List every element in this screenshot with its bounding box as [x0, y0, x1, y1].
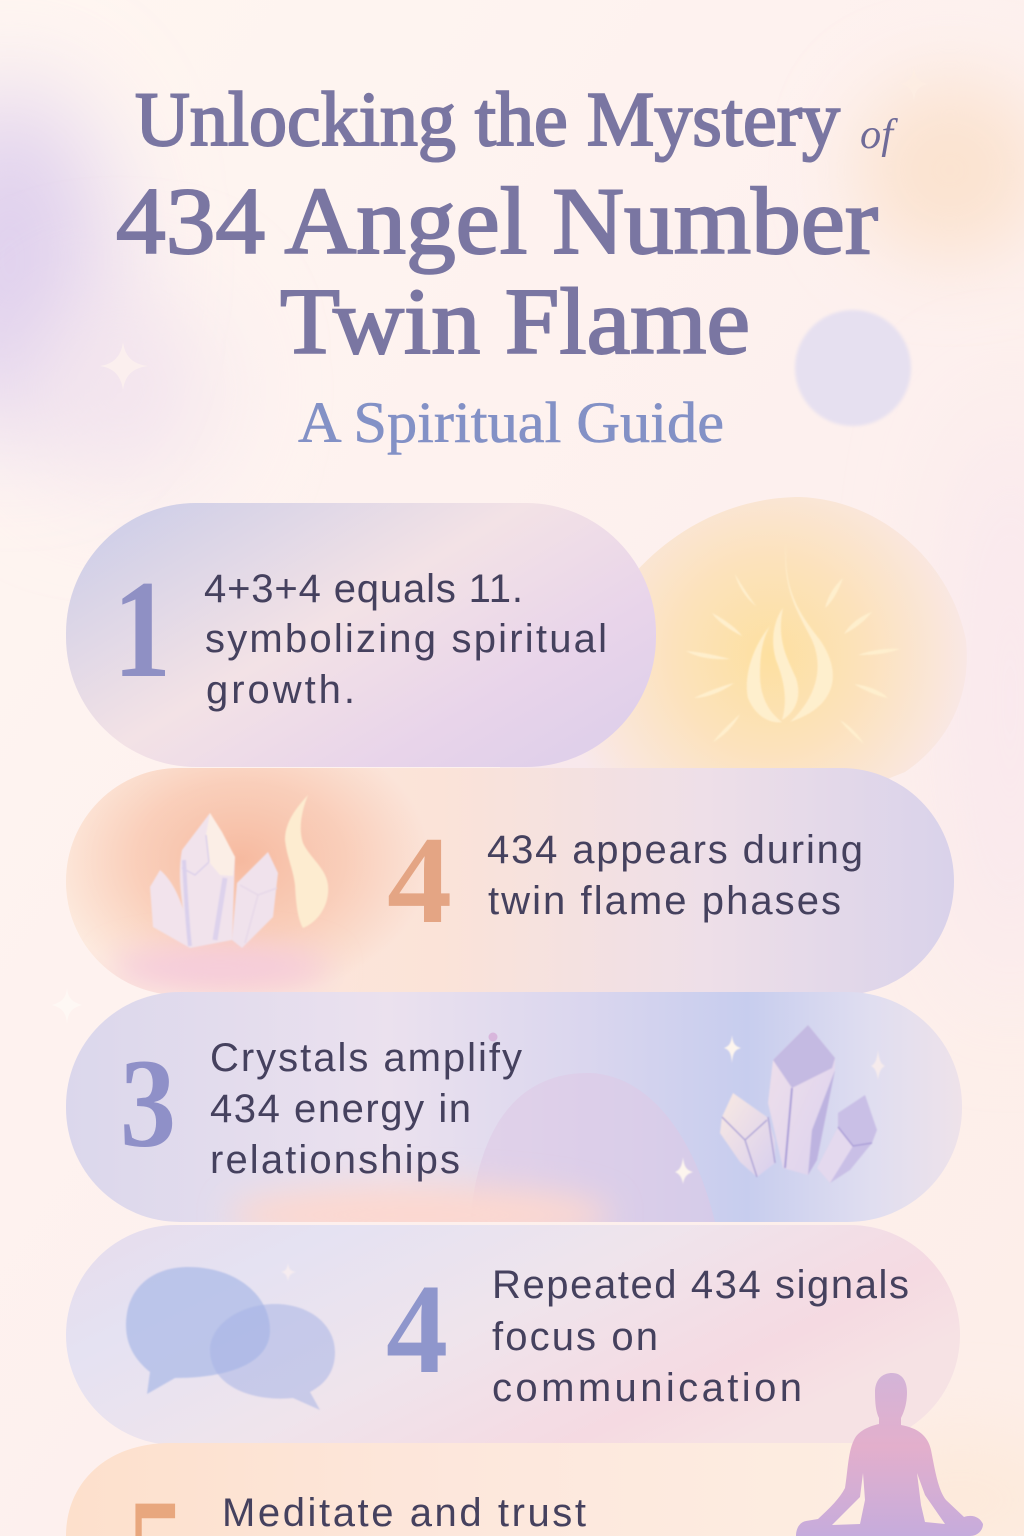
text: step 1	[204, 567, 607, 712]
side flame	[285, 795, 328, 928]
panel: step 3	[66, 992, 962, 1245]
icon: crystals and flame	[150, 795, 328, 948]
text: step 4: Repeated 434 signals	[492, 1263, 909, 1307]
subtitle: A Spiritual Guide	[298, 390, 724, 455]
text: step 4: communication	[492, 1366, 802, 1410]
title	[116, 76, 898, 374]
text: step 1: 4+3+4 equals 11.	[204, 567, 523, 611]
sparkle: left margin	[52, 988, 82, 1024]
sparkle: upper right	[900, 66, 928, 102]
decorative orb	[795, 310, 911, 426]
text: step 2	[487, 828, 863, 923]
icon: speech bubbles	[126, 1263, 335, 1410]
panel: step 1	[66, 503, 656, 767]
text: step 3: relationships	[210, 1138, 460, 1182]
number 3: 3	[120, 1034, 176, 1174]
title: Twin Flame	[280, 270, 750, 374]
flame rays	[735, 574, 756, 606]
title: of	[860, 112, 898, 158]
small dot	[488, 1032, 498, 1042]
text: step 5: Meditate and trust	[222, 1491, 586, 1535]
title: 434 Angel Number	[116, 168, 878, 274]
number 4: 4	[387, 812, 452, 950]
number 1: 1	[113, 552, 171, 707]
title: Unlocking the Mystery	[135, 76, 840, 162]
panel: step 2	[66, 768, 954, 994]
panel: step 4	[66, 1225, 960, 1445]
text: step 1: growth.	[206, 668, 355, 712]
text: step 1: symbolizing spiritual	[205, 617, 607, 661]
text: step 4	[492, 1263, 909, 1410]
text: step 4: focus on	[492, 1315, 658, 1359]
text: step 3: 434 energy in	[210, 1087, 471, 1131]
text: step 2: twin flame phases	[488, 879, 841, 923]
panel: flame halo	[500, 497, 967, 790]
icon: glowing flame	[686, 544, 900, 744]
number 4: 4	[386, 1258, 448, 1400]
text: step 3: Crystals amplify	[210, 1036, 522, 1080]
panel: step 5	[66, 1373, 983, 1536]
icon: meditating figure	[796, 1373, 983, 1536]
text: step 2: 434 appears during	[487, 828, 863, 872]
text: step 3	[210, 1036, 522, 1182]
icon: crystal cluster	[675, 1025, 885, 1184]
sparkle: upper left	[100, 342, 148, 390]
